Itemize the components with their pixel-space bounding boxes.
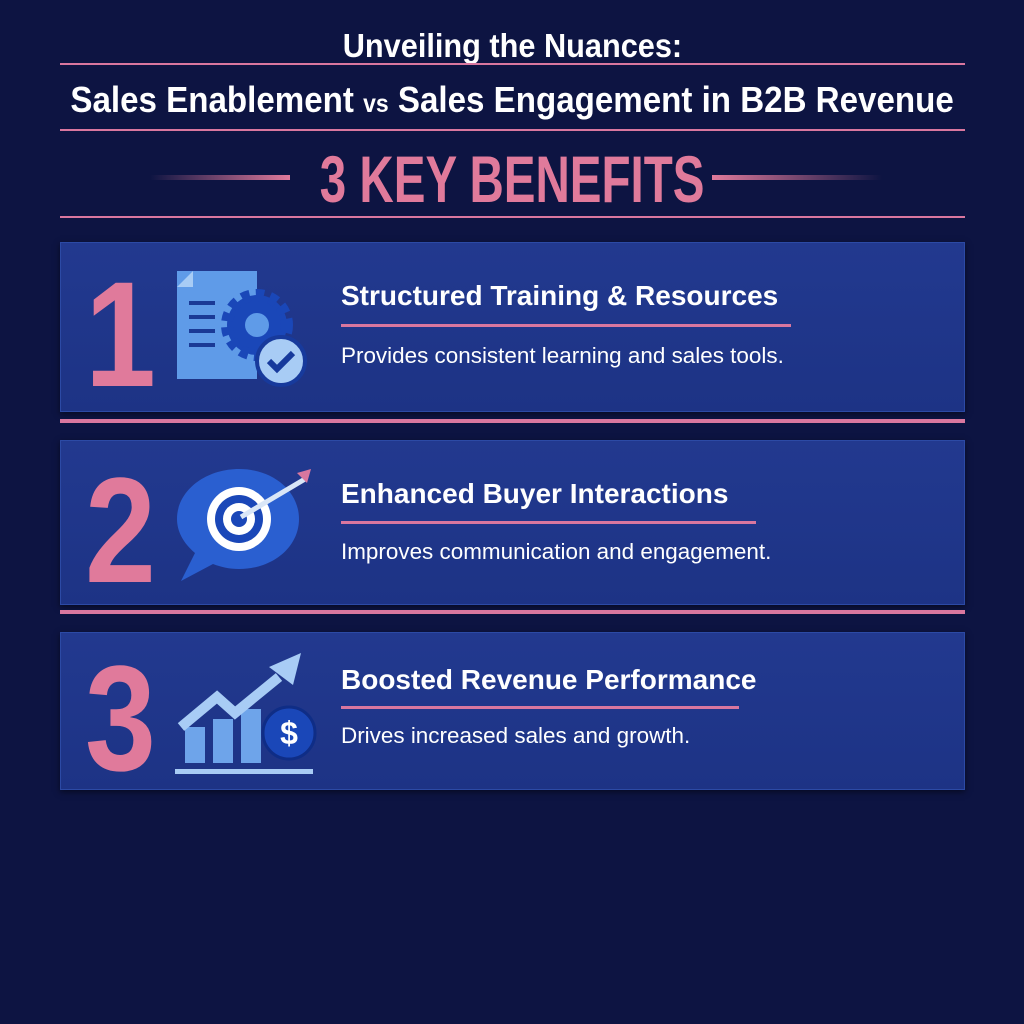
benefit 2 title: Enhanced Buyer Interactions xyxy=(341,478,728,509)
number 3: 3 xyxy=(85,634,156,802)
benefit 3 title: Boosted Revenue Performance xyxy=(341,664,756,695)
benefit 1 title: Structured Training & Resources xyxy=(341,280,778,311)
title line 2: Sales Enablement vs Sales Engagement in B2B Revenue xyxy=(70,79,954,120)
benefit 3 description: Drives increased sales and growth. xyxy=(341,723,690,748)
icon: speech bubble with target xyxy=(177,469,311,581)
number 2: 2 xyxy=(85,446,156,614)
benefit 2 description: Improves communication and engagement. xyxy=(341,539,771,564)
panel 3 xyxy=(60,632,965,790)
panel 2 xyxy=(60,440,965,605)
title line 1: Unveiling the Nuances: xyxy=(342,27,682,64)
icon: growth chart with dollar xyxy=(175,653,316,774)
panel 1 xyxy=(60,242,965,412)
heading: 3 key benefits: 3 KEY BENEFITS xyxy=(320,142,704,216)
icon: document with gear and check xyxy=(177,271,307,387)
icon: growth chart with dollar: $ xyxy=(280,715,298,751)
benefit 1 description: Provides consistent learning and sales tools. xyxy=(341,343,784,368)
number 1: 1 xyxy=(85,250,156,418)
